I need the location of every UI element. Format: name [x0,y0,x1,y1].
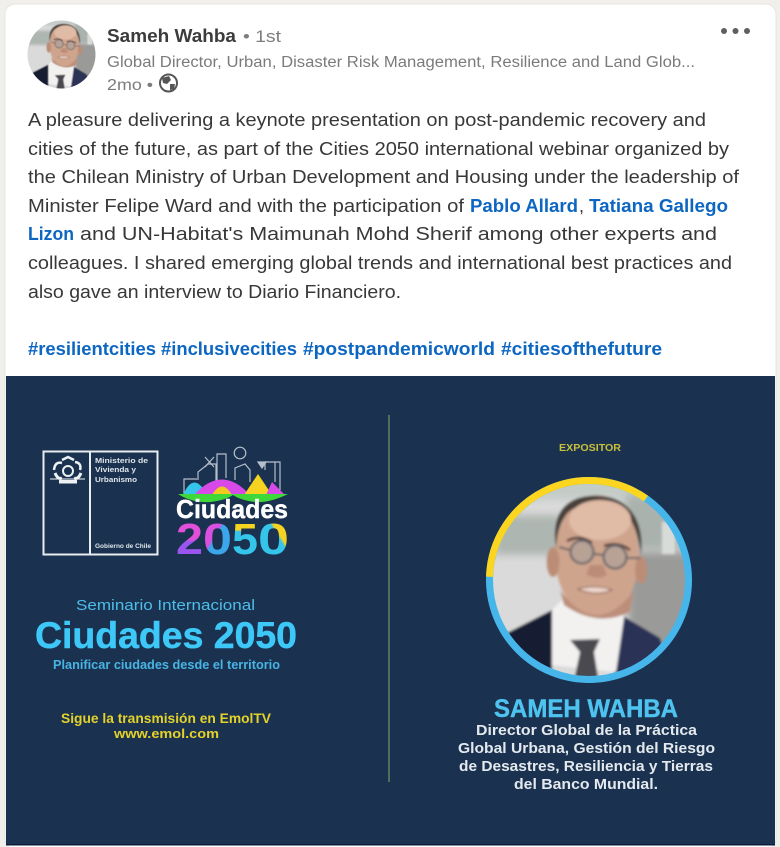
speaker role: del Banco Mundial. [514,776,658,793]
post body text: Tatiana Gallego [589,196,728,216]
post body text: also gave an interview to Diario Financiero. [28,282,401,302]
icon: coat of arms [50,457,85,484]
panel: webinar banner [6,376,775,846]
ministry name [95,456,151,550]
streaming note [61,711,271,741]
label: expositor: EXPOSITOR [559,442,621,454]
post body text [28,110,740,302]
ministry name: Ministerio de [95,456,148,465]
post body text: colleagues. I shared emerging global trends and international best practices and [28,253,732,273]
post body text: Pablo Allard [470,196,578,216]
logo year: 5 [232,515,258,564]
ministry name: Vivienda y [95,465,136,474]
icon: more menu [721,28,750,34]
ministry name: Gobierno de Chile [95,543,151,550]
seminar heading: Seminario Internacional [76,597,255,614]
hashtags [28,339,662,359]
author name: Sameh Wahba [107,26,237,46]
post body text: Lizon [28,224,74,244]
seminar heading: Planificar ciudades desde el territorio [53,658,280,672]
green leaf band [178,494,288,502]
logo year: 0 [203,515,232,564]
hashtags: #inclusivecities [161,339,297,359]
post body text: , [579,196,584,216]
seminar heading: Ciudades 2050 [35,615,297,656]
speaker role: de Desastres, Resiliencia y Tierras [459,758,713,775]
hashtags: #citiesofthefuture [501,339,662,359]
hashtags: #postpandemicworld [303,339,495,359]
connection degree: • 1st [243,27,281,46]
logo: ministry [44,451,158,555]
streaming note: www.emol.com [113,726,219,741]
speaker role: Director Global de la Práctica [476,722,698,739]
ministry name: Urbanismo [95,475,138,484]
post age: 2mo • [107,77,153,94]
author title: Global Director, Urban, Disaster Risk Management, Resilience and Land Glob... [107,54,695,71]
post body text: A pleasure delivering a keynote presentation on post-pandemic recovery and [28,110,706,130]
logo year: 2 [176,515,203,564]
speaker role [458,722,715,793]
post body text: Minister Felipe Ward and with the participation of [28,196,465,216]
speaker role: Global Urbana, Gestión del Riesgo [458,740,715,757]
speaker portrait [486,477,692,683]
post header [23,15,750,94]
post body text: cities of the future, as part of the Cities 2050 international webinar organized by [28,139,729,159]
streaming note: Sigue la transmisión en EmolTV [61,711,271,726]
rainbow hills [183,482,207,495]
logo year [176,515,289,564]
icon: avatar photo [28,20,96,88]
post body text: and UN-Habitat's Maimunah Mohd Sherif among other experts and [80,224,717,244]
logo: Ciudades 2050 [176,447,289,564]
seminar heading [35,597,297,672]
icon: globe [160,74,177,92]
speaker name: SAMEH WAHBA [494,695,678,723]
hashtags: #resilientcities [28,339,156,359]
logo word: Ciudades [176,494,288,524]
logo year: 0 [258,515,289,564]
post body text: the Chilean Ministry of Urban Development and Housing under the leadership of [28,167,740,187]
skyline [184,447,280,495]
